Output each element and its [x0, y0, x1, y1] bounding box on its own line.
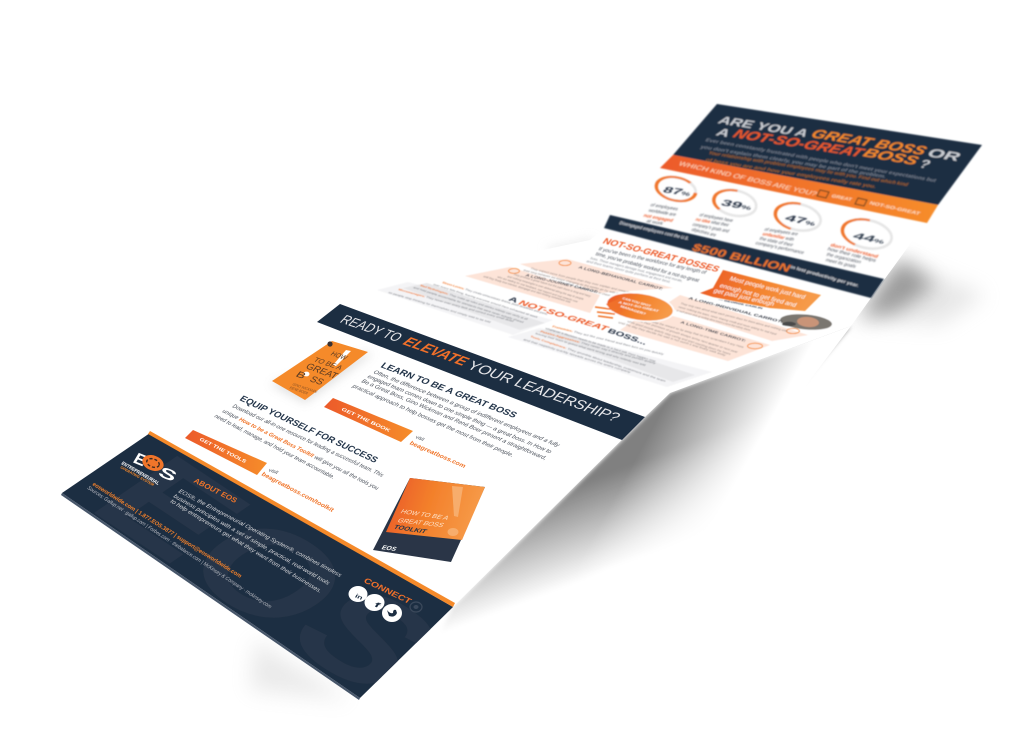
panel: footer	[61, 431, 455, 700]
peach panel: behavioral carrot	[515, 259, 673, 300]
book cover: HOW	[328, 351, 350, 362]
quiz band: WHICH KIND OF BOSS ARE YOU?	[677, 161, 818, 197]
cost band: Disengaged employees cost the U.S.	[618, 221, 690, 241]
gray panel: behaviours right: Frenemies: They act like your friend and then turn on you quickly	[552, 325, 665, 356]
panel: not-so-great bosses: Micromanagers: They hover over every task and correct every small detail	[398, 288, 515, 323]
panel: not-so-great bosses: If you've been in the workforce for any length of	[597, 246, 708, 275]
portrait photo	[777, 311, 835, 333]
stat: 44%: 44 %	[850, 230, 889, 246]
EOS logo: S	[155, 464, 180, 486]
gray panel: behaviours left	[377, 281, 553, 335]
toolkit cover: HOW TO BE A	[399, 509, 450, 522]
quote callout: Most people work just hard	[728, 275, 807, 301]
gray panel: behaviours right: Passive-Aggressives: They never say it directly and punish quietly	[540, 330, 657, 365]
gray panel: behaviours right: leaving their team to guess what went wrong and why nobody was told	[535, 332, 647, 367]
toolkit cover: EOS	[380, 544, 398, 552]
toolkit cover: GREAT BOSS	[396, 518, 445, 529]
get the tools button: GET THE TOOLS	[198, 437, 248, 465]
text: Often, the difference between a group of indifferent employees and a fully	[372, 369, 562, 449]
heading: a not-so-great boss: A	[506, 296, 520, 305]
panel: not-so-great bosses: until they finally lose interest, disengage and start looking somewhere else	[482, 275, 571, 304]
panel: not-so-great bosses: their long behavior list keeps changing as the weeks go by, with results unclear	[523, 269, 639, 300]
quote callout	[700, 270, 821, 311]
footer watermark: EOS	[59, 432, 479, 715]
stat: 47%: 47 %	[782, 212, 820, 228]
learn body text	[351, 369, 562, 461]
peach panel: behavioral carrot: A LONG-BEHAVIORAL CARROT:	[577, 266, 664, 291]
equip body text	[213, 403, 385, 491]
light bulb: MANAGER?	[619, 304, 647, 316]
stat: 87%: at work	[645, 219, 664, 226]
book cover: SS	[307, 376, 326, 387]
text: engaged team comes down to one simple thing — a great boss. In How to	[366, 374, 553, 455]
panel: not-so-great bosses: boss. These managers damage trust, engagement and morale,	[589, 256, 684, 283]
EOS logo: ENTREPRENEURIAL	[120, 461, 161, 486]
stat: 39%: of employees have	[698, 212, 735, 223]
light bulb	[595, 288, 677, 326]
book cover: GREAT	[303, 362, 341, 381]
stat: 87%: not engaged	[642, 212, 675, 223]
section heading: NOT-SO-GREAT BOSSES	[600, 237, 722, 274]
about text	[169, 488, 343, 594]
toolkit cover	[373, 478, 485, 562]
title: A	[713, 126, 735, 139]
section intro text: time, you've probably worked for a not-so-great	[594, 251, 701, 283]
panel: not-so-great bosses: while good people quietly stop caring and start counting down the hours	[626, 320, 732, 356]
stat: 47%	[754, 199, 823, 256]
stat: 44%: meet its goals	[824, 257, 858, 269]
stat: 39%: company's goals and	[691, 222, 731, 234]
title: ?	[916, 157, 935, 171]
heading: a not-so-great boss	[506, 296, 649, 347]
panel: not-so-great bosses: and their promises of growth always arrive next quarter or next year	[637, 319, 739, 354]
quote callout: — GEORGE CARLIN	[718, 298, 764, 310]
toolkit link	[260, 468, 336, 514]
title: ARE YOU A	[715, 115, 811, 140]
stat: 39%	[690, 186, 759, 238]
stat: 47%: of employees are	[763, 227, 800, 237]
peach panel: time carrot	[618, 310, 770, 361]
icon: facebook	[364, 594, 384, 611]
equip heading: EQUIP YOURSELF FOR SUCCESS	[238, 394, 380, 465]
get the book button	[324, 398, 413, 442]
book cover: RENE BOER	[288, 386, 310, 396]
section intro text	[585, 246, 708, 284]
about heading: ABOUT EOS	[192, 477, 239, 505]
icon: registered mark	[410, 602, 422, 612]
light bulb: CAN YOU SPOT	[621, 296, 652, 308]
book cover: B	[293, 371, 308, 381]
stat: 47%: unfamiliar with	[761, 231, 796, 242]
panel: ready to elevate	[185, 304, 645, 562]
book link: visit	[414, 435, 426, 442]
cost band: $500 BILLION	[689, 242, 793, 275]
peach panel: journey carrot	[465, 267, 600, 313]
panel: not-so-great bosses: and team members are left with nothing but a distant carrot to chase for now	[515, 271, 623, 300]
quiz band: NOT-SO-GREAT	[868, 201, 921, 217]
text: never noticing the team, never sharing credit and never asking for real input	[678, 305, 778, 336]
book link	[408, 435, 468, 470]
panel: top section	[604, 104, 982, 298]
panel: not-so-great bosses: and nothing meaningful is ever delivered along the way to people	[506, 275, 584, 301]
title: NOT-SO-GREAT	[730, 127, 869, 160]
stat: 44%: don't understand	[829, 243, 879, 260]
stat: 44%: the organization	[825, 252, 863, 265]
icon: linkedin: in	[354, 592, 365, 602]
toolkit cover: TOOLKIT	[391, 524, 429, 536]
panel: ready to elevate: practical approach to help bosses get the most from their people.	[351, 383, 515, 458]
book cover	[270, 341, 372, 403]
book cover: TO BE A	[311, 357, 344, 372]
drop shadows under the folded sheet	[250, 238, 985, 700]
panel: not-so-great bosses: They keep the reward so far away that no one remembers it any more	[643, 318, 745, 349]
panel: not-so-great bosses: until the day they decide the wait is not worth it and finally walk away	[618, 321, 727, 357]
title: BOSS	[860, 147, 921, 168]
header intro text	[699, 137, 938, 189]
header background	[673, 104, 982, 205]
toolkit link: beagreatboss.com/toolkit	[260, 471, 336, 514]
footer background	[62, 433, 453, 698]
title: GREAT BOSS	[808, 127, 930, 158]
cost band: in lost productivity per year.	[789, 265, 860, 288]
title: OR	[924, 147, 963, 164]
icon: linkedin	[348, 586, 368, 602]
panel: not-so-great bosses	[377, 237, 835, 387]
panel: ready to elevate: Download our all-in-one resource for leading a successful team. This	[231, 403, 385, 478]
stat: 47%: the state of their	[758, 236, 795, 248]
banner: YOUR LEADERSHIP?	[463, 359, 623, 425]
icon: twitter	[382, 604, 402, 622]
folded white sheet	[62, 104, 982, 698]
panel: not-so-great bosses: Mad Mythologists: They make up rules and stories nobody can verify at all	[420, 284, 528, 321]
EOS logo: E	[130, 451, 150, 470]
title	[713, 115, 963, 171]
panel: not-so-great bosses: so people stop thinking for themselves and simply wait to be told	[388, 291, 491, 324]
stat: 87%	[642, 173, 704, 226]
panel: not-so-great bosses: They expect more from people than they ever explain and reward no one for trying	[530, 267, 655, 300]
get the tools button	[185, 430, 267, 475]
panel: not-so-great bosses: and their teams never quite perform at their best.	[585, 260, 672, 284]
get the book button: GET THE BOOK	[340, 407, 392, 434]
peach panel: individual carrot	[663, 295, 808, 341]
stat: 87%: worldwide are	[647, 207, 679, 217]
icon: facebook: f	[372, 601, 383, 611]
panel: not-so-great bosses: Stress-Lovers: They create unnecessary drama, push deadlines and panic	[442, 281, 548, 316]
panel: not-so-great bosses: so each person ends up working alone toward a carrot that nobody shares	[675, 309, 751, 332]
cost band	[604, 215, 884, 298]
panel: not-so-great bosses: over every little thing, leaving everyone around them exhausted all week	[433, 283, 538, 319]
banner	[317, 304, 645, 440]
banner: ELEVATE	[399, 335, 471, 369]
panel: footer: business principles with a set of simple, practical, real-world tools	[172, 493, 331, 586]
peach panel: individual carrot: A LONG-INDIVIDUAL CARROT:	[687, 296, 784, 324]
quiz band: GREAT	[830, 194, 854, 202]
heading: a not-so-great boss: BOSS...	[605, 328, 649, 347]
stat: 39%: 39 %	[718, 197, 756, 212]
heading: a not-so-great boss: NOT-SO-GREAT	[517, 298, 611, 333]
peach panel: journey carrot: A LONG-JOURNEY CARROT:	[524, 274, 599, 294]
panel: not-so-great bosses: whenever a decision needs to be made or a hard talk must happen now	[544, 327, 657, 363]
panel: not-so-great bosses: who are waiting for real feedback, real support and real rewards now	[496, 275, 579, 303]
stat: 87%: 87 %	[660, 185, 694, 198]
footer edges	[61, 431, 455, 700]
stat: 47%: company's performance	[754, 241, 805, 256]
light bulb: A NOT-SO-GREAT	[618, 301, 660, 313]
gray panel: behaviours right: and that negativity quickly spreads across the entire company	[523, 338, 632, 374]
peach panel: time carrot: A LONG-TIME CARROT:	[679, 321, 747, 343]
stat: 44%	[824, 215, 894, 269]
stat: 39%: no idea what their	[694, 217, 731, 228]
EOS logo	[119, 451, 180, 487]
panel: ready to elevate: need to lead, manage, and hold your team accountable.	[213, 413, 336, 480]
toolkit link: visit	[267, 468, 280, 475]
stat: 39%: objectives are	[690, 226, 719, 238]
panel: not-so-great bosses: They promise a great future but the path there is long and hazy	[512, 273, 591, 298]
quiz band	[660, 155, 938, 223]
equip body text: unique How to be a Great Boss Toolkit will give you all the tools you	[221, 408, 380, 491]
gray panel: behaviours right	[508, 325, 712, 387]
EOS logo: OPERATING SYSTEM	[119, 466, 155, 487]
learn heading: LEARN TO BE A GREAT BOSS	[379, 361, 519, 420]
text: Be a Great Boss, Gino Wickman and René Boer present a straightforward,	[360, 378, 548, 461]
quote callout: enough not to get fired and	[718, 282, 798, 309]
stat: 44%: how their role helps	[826, 247, 878, 264]
banner: READY TO	[336, 313, 405, 345]
panel: not-so-great bosses: and hold people accountable for standards that were never actually shared	[413, 286, 525, 324]
book cover: GINO WICKMAN	[291, 382, 319, 394]
stat: 87%: of employees	[649, 202, 680, 212]
text: Toxic Complainers: They grumble about leadership, customers and the team	[530, 335, 666, 383]
connect heading: CONNECT	[362, 577, 414, 606]
quote callout: get paid just enough	[712, 288, 776, 308]
panel: footer: EOS®, the Entrepreneurial Operating System®, combines timeless	[177, 488, 343, 578]
book link: beagreatboss.com	[408, 440, 468, 470]
